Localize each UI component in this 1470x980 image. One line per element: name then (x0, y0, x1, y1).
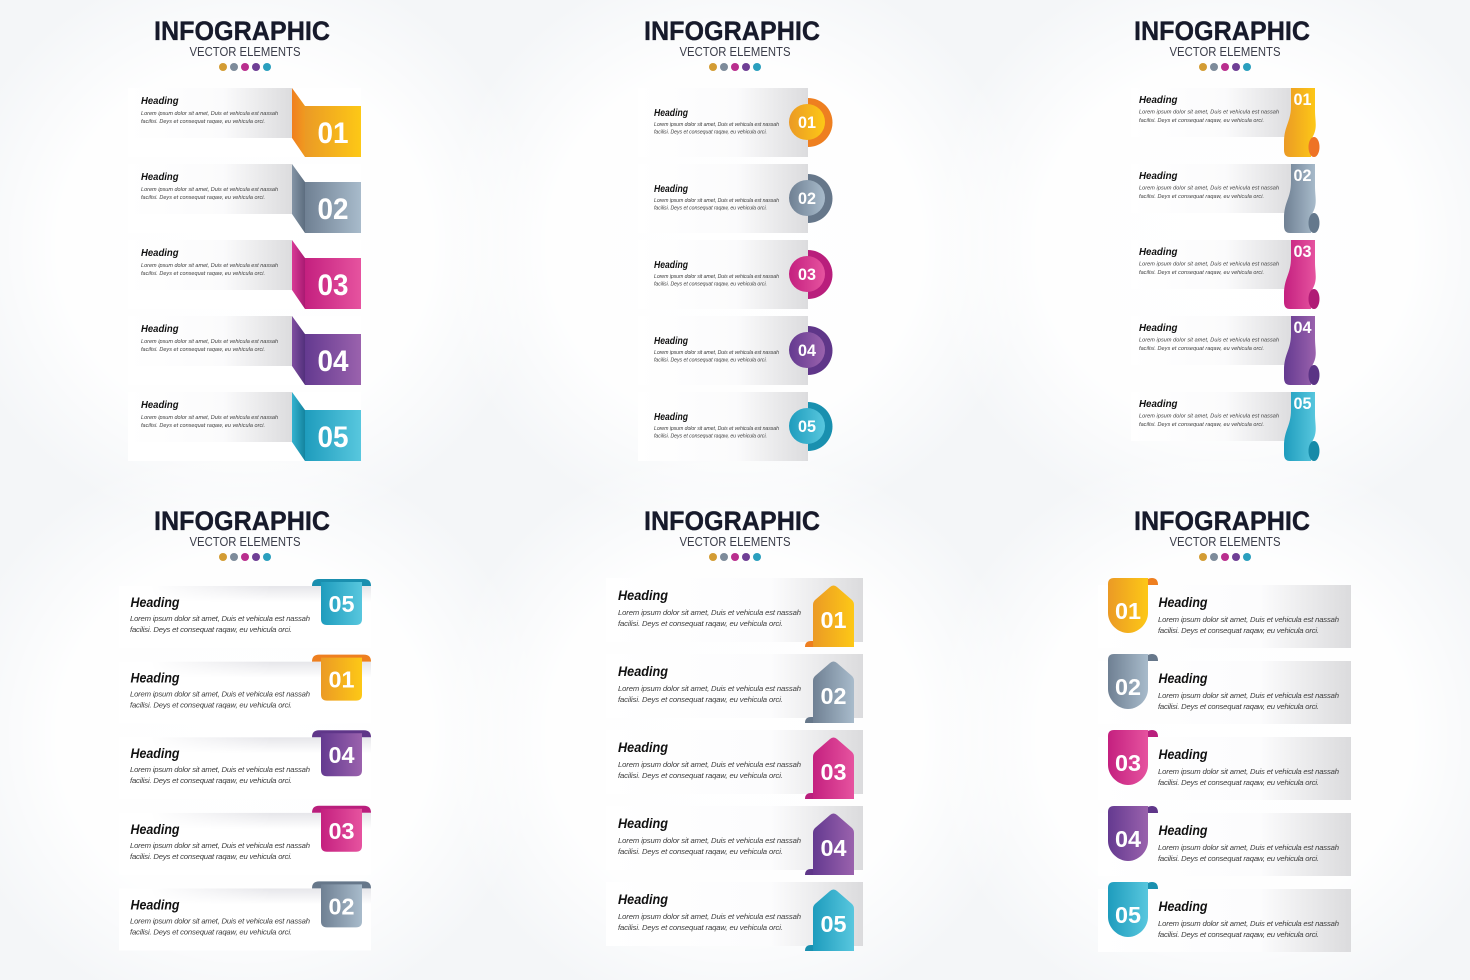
title: VECTOR ELEMENTS (190, 44, 301, 59)
colour dots (1199, 63, 1251, 71)
panel: bottom-left hanging tabs (119, 506, 371, 950)
step 01 (1131, 88, 1320, 157)
step 05: 05 (328, 591, 355, 617)
step 02: Lorem ipsum dolor sit amet, Duis et vehicula est nassah (1139, 186, 1279, 192)
step 02: Lorem ipsum dolor sit amet, Duis et vehicula est nassah (141, 187, 278, 193)
step 05: facilisi. Deys et consequat raqaw, eu vehicula orci. (654, 434, 767, 440)
step 05: Lorem ipsum dolor sit amet, Duis et vehicula est nassah (1158, 919, 1339, 928)
step 04 (638, 316, 832, 385)
step 04 (1131, 316, 1320, 385)
step 05 (606, 882, 863, 951)
title (644, 16, 820, 59)
panel: top-left folded ribbons (128, 16, 361, 461)
step 04 (606, 806, 863, 875)
step 05: 05 (318, 421, 348, 454)
step 04: Lorem ipsum dolor sit amet, Duis et vehicula est nassah (654, 350, 779, 356)
step 05: 05 (798, 417, 816, 436)
panel: bottom-right shields (1098, 506, 1351, 952)
step 03: Heading (618, 739, 668, 755)
title (1134, 16, 1310, 59)
step 05: Heading (618, 891, 668, 907)
step 01: Lorem ipsum dolor sit amet, Duis et vehicula est nassah (141, 111, 278, 117)
step 04: Heading (1139, 322, 1178, 334)
step 03: Lorem ipsum dolor sit amet, Duis et vehicula est nassah (618, 760, 801, 769)
step 02 (638, 164, 832, 233)
step 02 (1098, 654, 1351, 724)
step 04: 04 (798, 341, 817, 360)
step 03: facilisi. Deys et consequat raqaw, eu vehicula orci. (654, 282, 767, 288)
step 01: Heading (1158, 594, 1208, 610)
step 01: 01 (318, 117, 348, 150)
step 02: facilisi. Deys et consequat raqaw, eu vehicula orci. (141, 195, 265, 201)
step 02: facilisi. Deys et consequat raqaw, eu vehicula orci. (1158, 702, 1319, 711)
step 01 (128, 88, 361, 157)
step 05: facilisi. Deys et consequat raqaw, eu vehicula orci. (130, 625, 292, 634)
step 05: Heading (1139, 398, 1178, 410)
step 02: Heading (654, 184, 688, 195)
step 02: 02 (328, 893, 354, 919)
step 04: 04 (318, 345, 349, 378)
step 02: 02 (820, 683, 846, 709)
step 02: Heading (618, 663, 668, 679)
step 01: Lorem ipsum dolor sit amet, Duis et vehicula est nassah (654, 122, 779, 128)
step 05: 05 (1294, 394, 1312, 413)
step 03: facilisi. Deys et consequat raqaw, eu vehicula orci. (1158, 778, 1319, 787)
step 02: Lorem ipsum dolor sit amet, Duis et vehicula est nassah (618, 684, 801, 693)
step 01: facilisi. Deys et consequat raqaw, eu vehicula orci. (1139, 118, 1264, 124)
step 01: Lorem ipsum dolor sit amet, Duis et vehicula est nassah (618, 608, 801, 617)
step 03: facilisi. Deys et consequat raqaw, eu vehicula orci. (141, 271, 265, 277)
step 04: Heading (1158, 822, 1208, 838)
step 04: 04 (820, 835, 847, 861)
step 04: Lorem ipsum dolor sit amet, Duis et vehicula est nassah (1139, 338, 1279, 344)
step 04: facilisi. Deys et consequat raqaw, eu vehicula orci. (1139, 346, 1264, 352)
step 04: Heading (618, 815, 668, 831)
step 02: Lorem ipsum dolor sit amet, Duis et vehicula est nassah (654, 198, 779, 204)
step 03: facilisi. Deys et consequat raqaw, eu vehicula orci. (618, 771, 783, 780)
step 01 (638, 88, 832, 157)
step 01: Lorem ipsum dolor sit amet, Duis et vehicula est nassah (1139, 110, 1279, 116)
step 04: Lorem ipsum dolor sit amet, Duis et vehicula est nassah (1158, 843, 1339, 852)
panel: bottom-centre house tags (606, 506, 863, 951)
step 01 (1098, 578, 1351, 648)
step 05: Lorem ipsum dolor sit amet, Duis et vehicula est nassah (654, 426, 779, 432)
step 01: Heading (654, 108, 688, 119)
colour dots (219, 553, 271, 561)
title: VECTOR ELEMENTS (1170, 534, 1281, 549)
step 01: Heading (1139, 94, 1178, 106)
step 01: 01 (820, 607, 847, 633)
step 02 (130, 881, 371, 936)
step 04 (130, 730, 371, 784)
step 03 (130, 806, 371, 860)
step 02 (128, 164, 361, 233)
step 04: facilisi. Deys et consequat raqaw, eu vehicula orci. (618, 847, 783, 856)
step 01: Heading (618, 587, 668, 603)
step 03: 03 (328, 818, 354, 844)
step 01: Lorem ipsum dolor sit amet, Duis et vehicula est nassah (1158, 615, 1339, 624)
step 04: Heading (141, 323, 179, 335)
step 02: Lorem ipsum dolor sit amet, Duis et vehicula est nassah (1158, 691, 1339, 700)
step 01: 01 (328, 667, 355, 693)
step 02: Lorem ipsum dolor sit amet, Duis et vehicula est nassah (130, 916, 310, 925)
step 04: facilisi. Deys et consequat raqaw, eu vehicula orci. (130, 776, 292, 785)
step 04: facilisi. Deys et consequat raqaw, eu vehicula orci. (654, 358, 767, 364)
step 03: 03 (318, 269, 348, 302)
step 05 (638, 392, 832, 461)
step 01 (130, 654, 371, 709)
step 03: 03 (798, 265, 816, 284)
colour dots (709, 553, 761, 561)
colour dots (709, 63, 761, 71)
step 05: facilisi. Deys et consequat raqaw, eu vehicula orci. (1139, 422, 1264, 428)
step 02: facilisi. Deys et consequat raqaw, eu vehicula orci. (618, 695, 783, 704)
step 05 (1131, 392, 1320, 461)
step 01: facilisi. Deys et consequat raqaw, eu vehicula orci. (618, 619, 783, 628)
step 03: facilisi. Deys et consequat raqaw, eu vehicula orci. (1139, 270, 1264, 276)
step 03: Heading (141, 247, 179, 259)
step 03: 03 (1115, 750, 1141, 776)
step 02: facilisi. Deys et consequat raqaw, eu vehicula orci. (1139, 194, 1264, 200)
title (154, 506, 330, 549)
step 04: Lorem ipsum dolor sit amet, Duis et vehicula est nassah (141, 339, 278, 345)
step 01: Heading (130, 670, 180, 686)
step 03 (1098, 730, 1351, 800)
title (1134, 506, 1310, 549)
step 01: 01 (1294, 90, 1312, 109)
step 02: facilisi. Deys et consequat raqaw, eu vehicula orci. (654, 206, 767, 212)
step 05: Heading (1158, 898, 1208, 914)
step 04: Lorem ipsum dolor sit amet, Duis et vehicula est nassah (130, 765, 310, 774)
step 03: facilisi. Deys et consequat raqaw, eu vehicula orci. (130, 852, 292, 861)
step 02 (606, 654, 863, 723)
title: INFOGRAPHIC (1134, 506, 1310, 536)
step 04: 04 (328, 742, 355, 768)
step 03: Lorem ipsum dolor sit amet, Duis et vehicula est nassah (654, 274, 779, 280)
step 03: Heading (654, 260, 688, 271)
step 05: facilisi. Deys et consequat raqaw, eu vehicula orci. (141, 423, 265, 429)
step 01 (606, 578, 863, 647)
step 02: Heading (1139, 170, 1178, 182)
title: VECTOR ELEMENTS (680, 44, 791, 59)
step 02: 02 (1115, 674, 1141, 700)
step 03 (128, 240, 361, 309)
title: VECTOR ELEMENTS (190, 534, 301, 549)
title (644, 506, 820, 549)
title: INFOGRAPHIC (154, 16, 330, 46)
step 04: facilisi. Deys et consequat raqaw, eu vehicula orci. (1158, 854, 1319, 863)
step 05: facilisi. Deys et consequat raqaw, eu vehicula orci. (618, 923, 783, 932)
step 01: facilisi. Deys et consequat raqaw, eu vehicula orci. (654, 130, 767, 136)
step 01: 01 (1115, 598, 1141, 624)
step 03: Lorem ipsum dolor sit amet, Duis et vehicula est nassah (1158, 767, 1339, 776)
step 03: Heading (1139, 246, 1178, 258)
step 03 (606, 730, 863, 799)
step 05: Lorem ipsum dolor sit amet, Duis et vehicula est nassah (618, 912, 801, 921)
step 01: Heading (141, 95, 179, 107)
step 01: facilisi. Deys et consequat raqaw, eu vehicula orci. (130, 701, 292, 710)
step 03: Heading (1158, 746, 1208, 762)
colour dots (1199, 553, 1251, 561)
step 04 (128, 316, 361, 385)
step 02 (1131, 164, 1320, 233)
panel: top-right scrolls (1131, 16, 1320, 461)
step 05 (128, 392, 361, 461)
step 02: Heading (130, 896, 180, 912)
step 05: 05 (820, 911, 847, 937)
step 05: Heading (654, 412, 688, 423)
step 01: 01 (798, 113, 816, 132)
step 05 (130, 579, 371, 634)
step 02: 02 (1294, 166, 1312, 185)
step 01: facilisi. Deys et consequat raqaw, eu vehicula orci. (141, 119, 265, 125)
step 05: 05 (1115, 902, 1141, 928)
step 04: Lorem ipsum dolor sit amet, Duis et vehicula est nassah (618, 836, 801, 845)
panel: top-centre circles (638, 16, 832, 461)
step 02: facilisi. Deys et consequat raqaw, eu vehicula orci. (130, 927, 292, 936)
step 05: Lorem ipsum dolor sit amet, Duis et vehicula est nassah (130, 614, 310, 623)
step 02: 02 (318, 193, 348, 226)
title: VECTOR ELEMENTS (680, 534, 791, 549)
step 05: facilisi. Deys et consequat raqaw, eu vehicula orci. (1158, 930, 1319, 939)
step 04: Heading (130, 745, 180, 761)
step 05 (1098, 882, 1351, 952)
step 03: 03 (1294, 242, 1312, 261)
step 01: Lorem ipsum dolor sit amet, Duis et vehicula est nassah (130, 690, 310, 699)
step 03: 03 (820, 759, 846, 785)
step 01: facilisi. Deys et consequat raqaw, eu vehicula orci. (1158, 626, 1319, 635)
step 03: Heading (130, 821, 180, 837)
step 04: Heading (654, 336, 688, 347)
step 04: 04 (1115, 826, 1141, 852)
step 05: Heading (130, 594, 180, 610)
step 03 (1131, 240, 1320, 309)
title: INFOGRAPHIC (644, 506, 820, 536)
colour dots (219, 63, 271, 71)
step 04: facilisi. Deys et consequat raqaw, eu vehicula orci. (141, 347, 265, 353)
title: INFOGRAPHIC (644, 16, 820, 46)
title: INFOGRAPHIC (1134, 16, 1310, 46)
title: VECTOR ELEMENTS (1170, 44, 1281, 59)
title (154, 16, 330, 59)
title: INFOGRAPHIC (154, 506, 330, 536)
step 03 (638, 240, 832, 309)
step 05: Lorem ipsum dolor sit amet, Duis et vehicula est nassah (141, 415, 278, 421)
step 02: 02 (798, 189, 816, 208)
step 02: Heading (1158, 670, 1208, 686)
step 04 (1098, 806, 1351, 876)
step 03: Lorem ipsum dolor sit amet, Duis et vehicula est nassah (141, 263, 278, 269)
step 05: Lorem ipsum dolor sit amet, Duis et vehicula est nassah (1139, 414, 1279, 420)
step 02: Heading (141, 171, 179, 183)
step 03: Lorem ipsum dolor sit amet, Duis et vehicula est nassah (130, 841, 310, 850)
step 05: Heading (141, 399, 179, 411)
step 04: 04 (1294, 318, 1312, 337)
step 03: Lorem ipsum dolor sit amet, Duis et vehicula est nassah (1139, 262, 1279, 268)
